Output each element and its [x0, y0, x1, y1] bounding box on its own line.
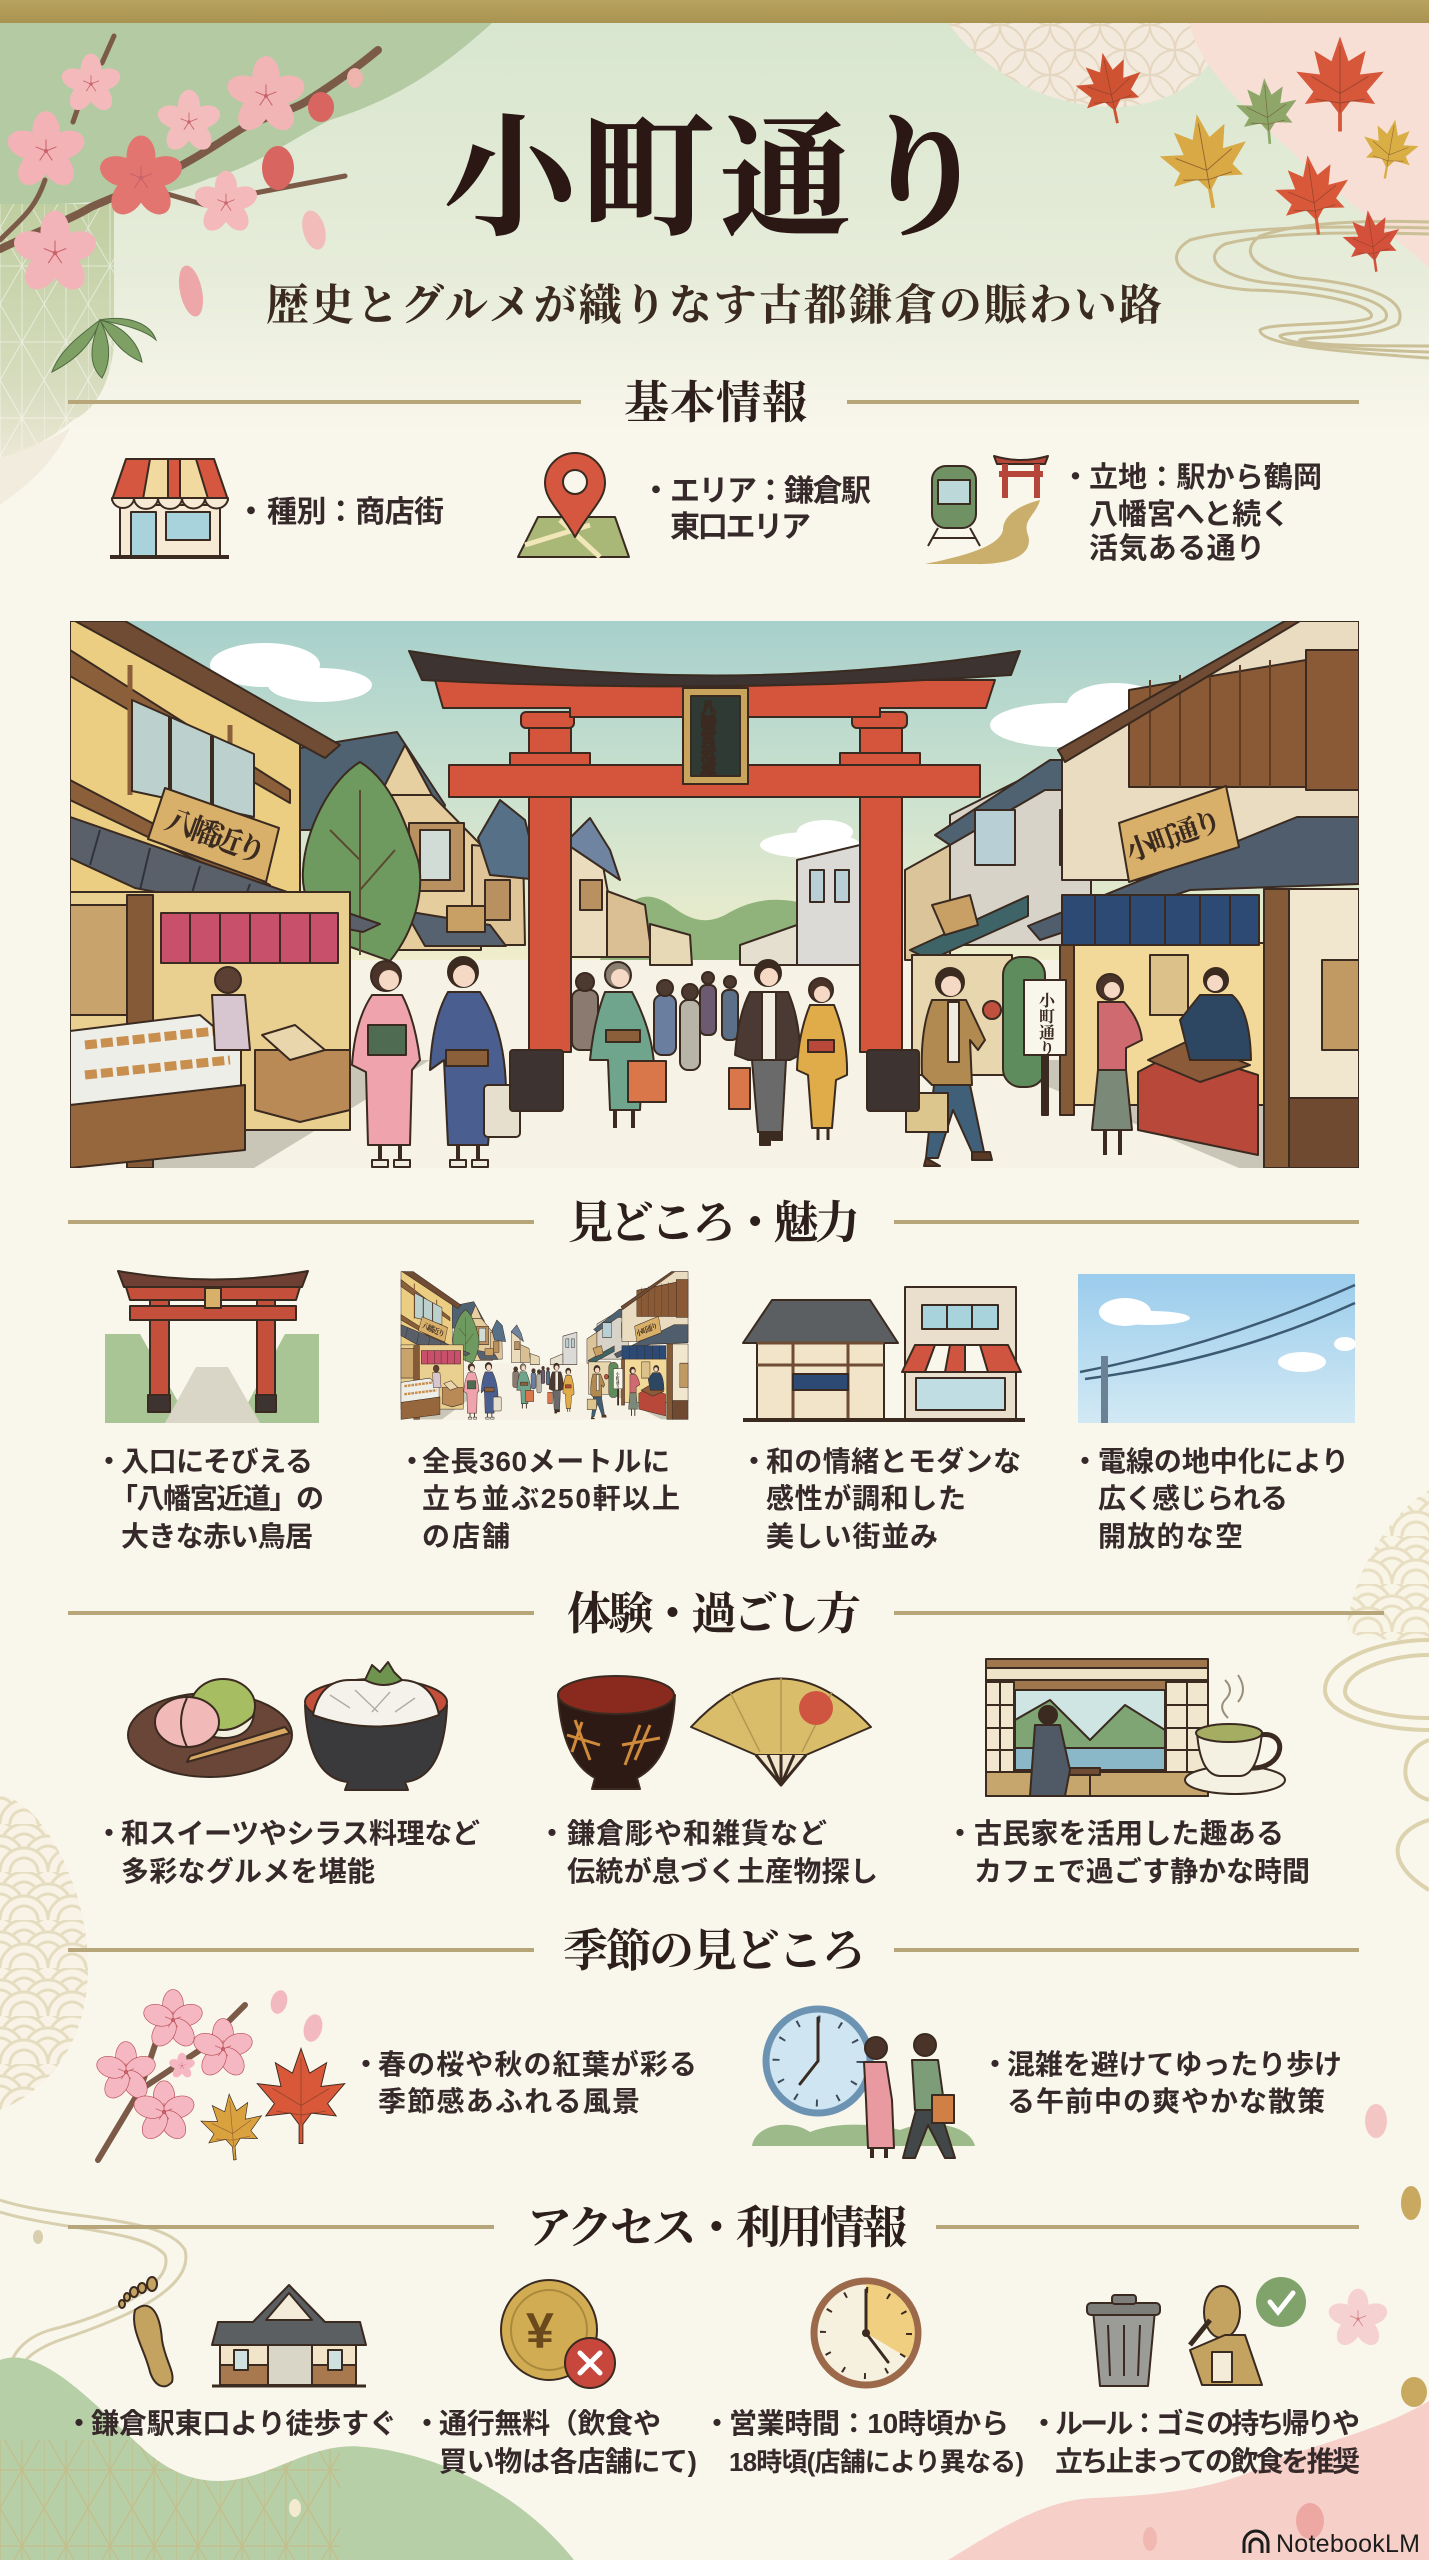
- signboard: 小町通り: 小町通り: [1121, 804, 1226, 869]
- text: torii highlight: 入口にそびえる: [121, 1446, 313, 1477]
- text: opening hours: [703, 2408, 1024, 2477]
- icon: station building: [212, 2285, 366, 2386]
- text: type: 種別：商店街: [267, 496, 444, 529]
- plaque: [683, 688, 748, 784]
- text: area: ・: [641, 475, 671, 508]
- icon: open sky without power lines: [1078, 1274, 1356, 1423]
- icon: cup of tea: [1185, 1675, 1285, 1794]
- person in navy kimono: [430, 957, 520, 1167]
- text: opening hours: 営業時間：10時頃から: [729, 2408, 1009, 2439]
- icon: torii entrance: [105, 1271, 319, 1423]
- text: gourmet: 多彩なグルメを堪能: [121, 1855, 375, 1887]
- gold top band: [0, 0, 1429, 23]
- text: souvenirs: 鎌倉彫や和雑貨など: [567, 1818, 827, 1849]
- text: open sky: 広く感じられる: [1098, 1483, 1288, 1514]
- text: area: [641, 475, 871, 544]
- icon: blossoms and maple leaves: [94, 1988, 345, 2163]
- text: cafe: カフェで過ごす静かな時間: [974, 1855, 1310, 1887]
- person in yellow kimono: [797, 978, 847, 1140]
- text: access on foot: ・: [65, 2408, 93, 2439]
- text: torii highlight: 大きな赤い鳥居: [121, 1521, 313, 1552]
- crowd of pedestrians: [352, 957, 1251, 1167]
- person in brown jacket: [906, 968, 1001, 1166]
- text: type: ・: [236, 496, 266, 529]
- text: location: 活気ある通り: [1089, 532, 1265, 565]
- text: open sky: [1071, 1446, 1349, 1552]
- text: location: [1061, 461, 1322, 565]
- text: seasonal scenery: 春の桜や秋の紅葉が彩る: [378, 2048, 697, 2080]
- text: location: ・: [1061, 462, 1090, 494]
- text: location: 立地：駅から鶴岡: [1089, 461, 1322, 494]
- section heading: seasonal highlights: 季節の見どころ: [563, 1926, 866, 1976]
- person in green kimono: [590, 962, 666, 1128]
- text: seasonal scenery: ・: [352, 2049, 380, 2080]
- stand sign: 小町通り: [1036, 992, 1054, 1056]
- sky with clouds and mountains: [70, 621, 1359, 966]
- text: morning walk: 混雑を避けてゆったり歩け: [1007, 2049, 1342, 2080]
- text: cafe: [946, 1818, 1310, 1887]
- text: townscape: 美しい街並み: [766, 1521, 938, 1552]
- text: area: 東口エリア: [670, 511, 811, 544]
- person in pink sweater: [1092, 974, 1142, 1155]
- illustration: hero street scene with torii: [70, 621, 1359, 1168]
- title: 小町通り: [444, 106, 989, 253]
- text: rules: [1030, 2407, 1360, 2477]
- text: townscape: 感性が調和した: [766, 1482, 966, 1514]
- text: gourmet: ・: [95, 1818, 123, 1849]
- text: shop count: の店舗: [422, 1521, 510, 1552]
- text: opening hours: 18時頃(店舗により異なる): [729, 2447, 1024, 2477]
- text: shop count: 立ち並ぶ250軒以上: [422, 1483, 680, 1514]
- text: free admission: 買い物は各店舗にて): [439, 2446, 697, 2477]
- text: torii highlight: 「八幡宮近道」の: [110, 1483, 324, 1514]
- icon: shopping street: [401, 1272, 688, 1419]
- text: torii highlight: [95, 1446, 324, 1552]
- icon: clock and strolling couple: [752, 2009, 975, 2158]
- decorative petals: [33, 2104, 1427, 2551]
- icon: train, torii and road: [925, 456, 1048, 564]
- text: rules: 立ち止まっての飲食を推奨: [1055, 2446, 1360, 2477]
- text: souvenirs: [538, 1818, 878, 1887]
- text: free admission: ・: [413, 2408, 441, 2439]
- icon: japanese and modern buildings: [743, 1287, 1025, 1420]
- text: open sky: 電線の地中化により: [1098, 1446, 1349, 1477]
- street with buildings and people: [70, 621, 1359, 1168]
- text: townscape: ・: [740, 1446, 768, 1477]
- person in dark jacket: [729, 960, 800, 1145]
- text: morning walk: ・: [981, 2049, 1009, 2080]
- text: rules: ルール：ゴミの持ち帰りや: [1055, 2407, 1360, 2439]
- text: torii highlight: ・: [95, 1446, 123, 1477]
- section heading: basic info: 基本情報: [624, 378, 807, 428]
- icon: opening hours clock: [814, 2281, 918, 2385]
- text: souvenirs: ・: [538, 1818, 566, 1849]
- signboard: 小町通り: [1119, 786, 1239, 882]
- large red torii gate: [409, 651, 1020, 1111]
- person in pink kimono: [352, 961, 420, 1167]
- text: access on foot: 鎌倉駅東口より徒歩すぐ: [91, 2408, 397, 2439]
- icon: free of charge: ¥: [526, 2303, 554, 2359]
- shopkeeper in navy: [1180, 968, 1251, 1060]
- text: free admission: [413, 2408, 697, 2477]
- icon: footprint: [119, 2277, 173, 2386]
- icon: wagashi on a plate: [128, 1679, 292, 1777]
- text: area: エリア：鎌倉駅: [670, 475, 871, 508]
- icon: free of charge: [501, 2280, 615, 2388]
- section heading: access: アクセス・利用情報: [527, 2203, 907, 2253]
- section heading: highlights: 見どころ・魅力: [568, 1198, 860, 1248]
- text: shop count: 全長360メートルに: [422, 1446, 670, 1477]
- text: townscape: 和の情緒とモダンな: [766, 1445, 1021, 1477]
- text: shop count: [398, 1446, 680, 1552]
- text: souvenirs: 伝統が息づく土産物探し: [567, 1855, 878, 1887]
- icon: folding fan: [691, 1678, 871, 1785]
- text: open sky: ・: [1071, 1446, 1099, 1477]
- signboard: 八幡近り: 八幡近り: [161, 804, 271, 870]
- plaque: 八幡宮近道: [699, 700, 716, 776]
- text: seasonal scenery: [352, 2048, 697, 2117]
- icon: map pin: [518, 453, 629, 557]
- text: free admission: 通行無料（飲食や: [439, 2408, 661, 2439]
- text: rules: ・: [1030, 2408, 1058, 2439]
- illustration: cherry blossom branch: [0, 36, 378, 378]
- icon: shirasu rice bowl: [305, 1662, 447, 1790]
- text: shop count: ・: [398, 1446, 426, 1477]
- text: cafe: ・: [946, 1818, 974, 1849]
- text: townscape: [740, 1445, 1021, 1552]
- icon: shop: [110, 459, 229, 557]
- signboard: 八幡近り: [148, 788, 279, 882]
- subtitle: 歴史とグルメが織りなす古都鎌倉の賑わい路: [266, 282, 1162, 330]
- text: opening hours: ・: [703, 2408, 731, 2439]
- text: cafe: 古民家を活用した趣ある: [974, 1818, 1284, 1849]
- icon: lacquer cup: [558, 1676, 675, 1789]
- text: gourmet: [95, 1818, 480, 1887]
- text: open sky: 開放的な空: [1098, 1521, 1243, 1552]
- illustration: autumn maple leaves: [1070, 36, 1422, 276]
- icon: trash bin and eating rule: [1087, 2277, 1306, 2386]
- section heading: experiences: 体験・過ごし方: [567, 1589, 861, 1639]
- brand: NotebookLM: NotebookLM: [1276, 2530, 1420, 2558]
- text: morning walk: る午前中の爽やかな散策: [1007, 2086, 1325, 2117]
- text: gourmet: 和スイーツやシラス料理など: [121, 1818, 480, 1849]
- icon: old house cafe: [986, 1659, 1208, 1796]
- text: location: 八幡宮へと続く: [1089, 498, 1290, 531]
- text: morning walk: [981, 2049, 1342, 2117]
- text: seasonal scenery: 季節感あふれる風景: [378, 2086, 640, 2117]
